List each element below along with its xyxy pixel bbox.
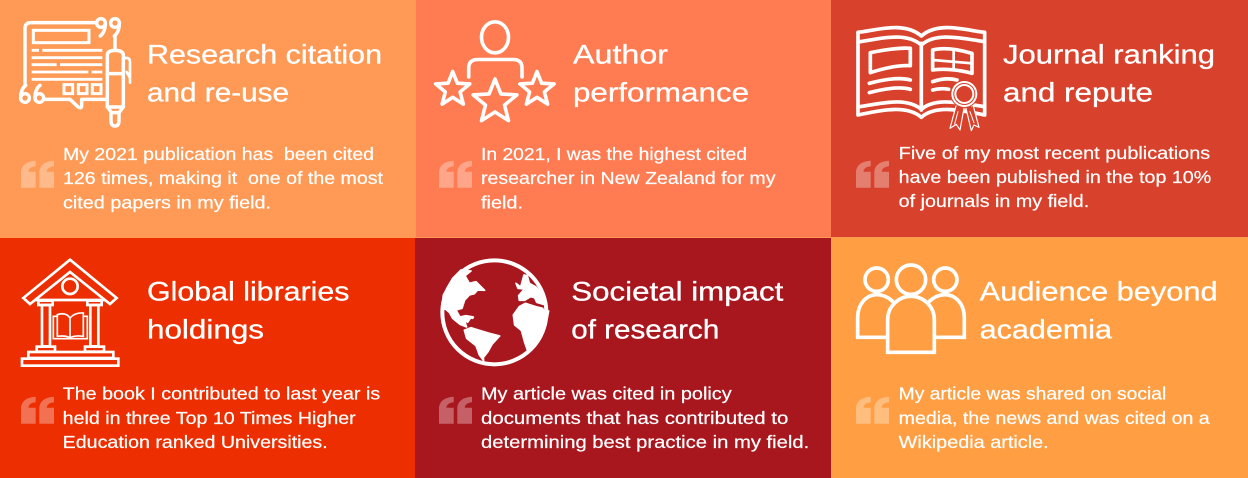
- icon: quotation mark: [439, 397, 472, 424]
- icon: open book with rosette: [858, 28, 985, 131]
- text block: journal evidence: Five of my most recent publications: [899, 143, 1210, 163]
- text block: library evidence: Education ranked Universities.: [63, 432, 328, 452]
- heading: research citation: Research citation: [147, 40, 382, 70]
- text block: author evidence: [481, 144, 776, 212]
- text block: library evidence: held in three Top 10 Times Higher: [63, 408, 356, 428]
- heading: author performance: Author: [573, 40, 668, 70]
- text block: audience evidence: My article was shared on social: [899, 384, 1166, 404]
- heading: global libraries: [147, 276, 350, 345]
- heading: audience beyond academia: [980, 276, 1218, 345]
- icon: three people: [858, 265, 964, 352]
- text block: library evidence: The book I contributed to last year is: [63, 384, 380, 404]
- panel: journal ranking and repute: [831, 0, 1248, 237]
- panel: global libraries holdings: [0, 238, 415, 478]
- text block: journal evidence: of journals in my field.: [899, 191, 1089, 211]
- heading: societal impact: Societal impact: [571, 276, 784, 306]
- text block: policy evidence: determining best practice in my field.: [481, 432, 809, 452]
- heading: journal ranking: and repute: [1003, 78, 1153, 108]
- icon: globe: [442, 260, 549, 364]
- heading: research citation: and re-use: [147, 78, 289, 108]
- heading: societal impact: [571, 276, 784, 345]
- text block: audience evidence: media, the news and was cited on a: [899, 408, 1210, 428]
- heading: author performance: [573, 40, 749, 108]
- text block: audience evidence: [899, 384, 1210, 452]
- icon: document, citation marks and pen: [21, 19, 130, 126]
- heading: journal ranking: [1003, 40, 1215, 108]
- icon: quotation mark: [856, 397, 889, 424]
- text block: policy evidence: documents that has contributed to: [481, 408, 788, 428]
- icon: quotation mark: [856, 161, 889, 188]
- text block: citation evidence: cited papers in my field.: [63, 192, 271, 212]
- heading: audience beyond academia: Audience beyond: [980, 276, 1218, 306]
- heading: audience beyond academia: academia: [980, 315, 1112, 345]
- heading: research citation: [147, 40, 382, 108]
- panel: societal impact of research: [415, 238, 831, 478]
- heading: author performance: performance: [573, 78, 749, 108]
- icon: quotation mark: [21, 397, 54, 424]
- icon: quotation mark: [21, 161, 54, 188]
- text block: policy evidence: [481, 384, 809, 452]
- panel: research citation and re-use: [0, 0, 416, 238]
- text block: journal evidence: have been published in the top 10%: [899, 167, 1211, 187]
- heading: societal impact: of research: [571, 315, 719, 345]
- icon: person with three stars: [436, 22, 554, 121]
- text block: author evidence: field.: [481, 192, 523, 212]
- text block: journal evidence: [899, 143, 1211, 211]
- heading: global libraries: holdings: [147, 315, 264, 345]
- panel: audience beyond academia: [831, 238, 1248, 478]
- text block: author evidence: In 2021, I was the highest cited: [481, 144, 747, 164]
- text block: author evidence: researcher in New Zealand for my: [481, 168, 776, 188]
- panel: author performance: [416, 0, 831, 237]
- text block: citation evidence: My 2021 publication has been cited: [63, 144, 374, 164]
- text block: library evidence: [63, 384, 380, 452]
- icon: library building with book: [22, 260, 118, 366]
- text block: citation evidence: 126 times, making it one of the most: [63, 168, 383, 188]
- heading: journal ranking: Journal ranking: [1003, 40, 1215, 70]
- text block: policy evidence: My article was cited in policy: [481, 384, 732, 404]
- icon: quotation mark: [439, 161, 472, 188]
- heading: global libraries: Global libraries: [147, 276, 350, 306]
- text block: audience evidence: Wikipedia article.: [899, 432, 1049, 452]
- text block: citation evidence: [63, 144, 383, 212]
